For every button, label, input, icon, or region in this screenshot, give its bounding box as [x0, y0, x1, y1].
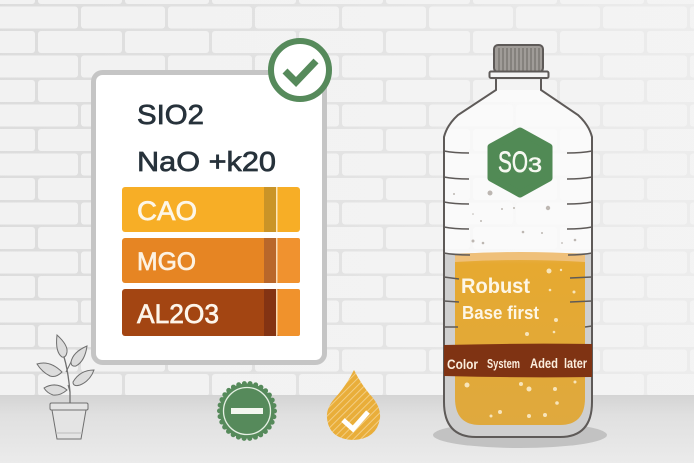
- icon: potted plant: [37, 335, 94, 439]
- bar: CAO: [122, 187, 300, 232]
- bar: AL2O3: [122, 289, 300, 336]
- icon: oil drop with check: [327, 370, 380, 440]
- bubbles: [464, 268, 576, 418]
- label: SIO2: SIO2: [137, 99, 204, 130]
- bar: CAO: CAO: [137, 196, 197, 226]
- band: color system added later: Color: [447, 356, 478, 372]
- measurement ticks: [444, 151, 592, 327]
- icon: minus seal badge: [220, 384, 274, 438]
- icon: check circle: [271, 41, 329, 99]
- band: color system added later: later: [564, 356, 588, 371]
- bottle floor shadow: [433, 422, 607, 448]
- bottle glass: [444, 90, 592, 437]
- label: Base first: Base first: [462, 303, 539, 323]
- hexagon: SO3: 3: [528, 154, 542, 177]
- bar: MGO: MGO: [137, 248, 196, 276]
- liquid fill: [455, 254, 585, 425]
- hexagon: SO3: SO: [498, 146, 528, 179]
- floor: [0, 395, 694, 463]
- label: Robust: Robust: [461, 275, 530, 298]
- panel: oxide list card: [94, 72, 324, 362]
- bottle: [444, 45, 592, 437]
- band: color system added later: Aded: [530, 356, 558, 371]
- bar: MGO: [122, 238, 300, 283]
- bottle cap: [490, 45, 548, 78]
- band: color system added later: System: [487, 356, 520, 371]
- bottle outline: [444, 78, 592, 437]
- hexagon: SO3: [491, 131, 549, 194]
- label: NaO + k20: NaO +k20: [137, 146, 276, 177]
- bar: AL2O3: AL2O3: [137, 299, 219, 329]
- glass base band: [444, 253, 592, 437]
- band: color system added later: [444, 344, 592, 377]
